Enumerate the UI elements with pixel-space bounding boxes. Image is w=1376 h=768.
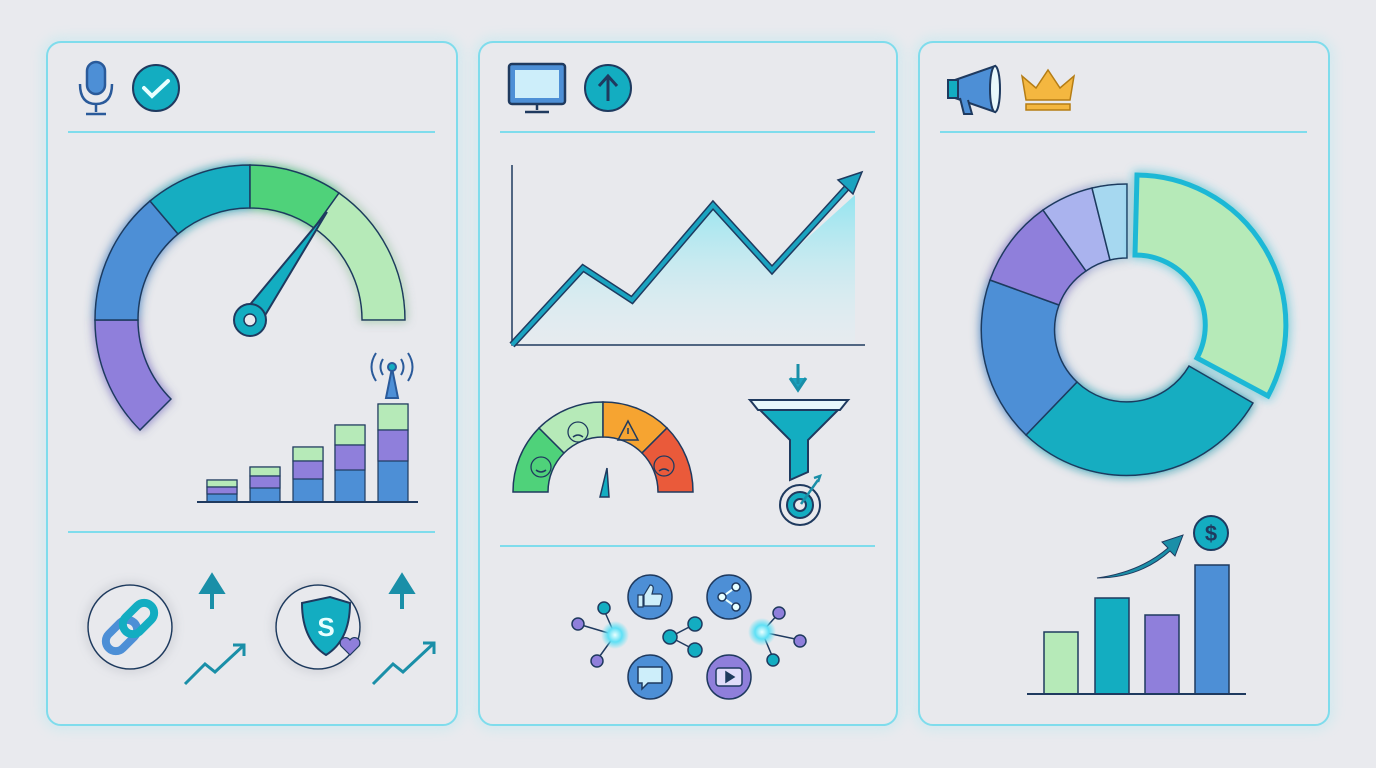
icon: check circle	[133, 65, 179, 111]
panel: middle	[479, 42, 897, 725]
icon: antenna	[372, 353, 412, 398]
icon: up arrow 1	[202, 576, 222, 609]
diagram: social network	[572, 575, 806, 699]
gauge needle	[234, 212, 327, 336]
icon: shield circle: S	[317, 612, 335, 642]
icon: link circle	[88, 585, 172, 669]
icon: funnel with target	[750, 364, 848, 525]
icon: monitor	[509, 64, 565, 112]
chart: stacked bars	[197, 404, 418, 502]
icon: trend arrow 2	[373, 643, 434, 684]
chart: donut	[981, 175, 1286, 475]
icon: up arrow 2	[392, 576, 412, 609]
chart: speedometer gauge	[95, 165, 405, 430]
icon: megaphone	[948, 66, 1000, 114]
icon: trend arrow 1	[185, 645, 244, 684]
chart: line growth	[512, 165, 865, 345]
icon: shield circle	[276, 585, 360, 669]
panel: right	[919, 42, 1329, 725]
panel: left	[47, 42, 457, 725]
icon: up arrow circle	[585, 65, 631, 111]
icon: dollar coin	[1194, 516, 1228, 550]
chart: sentiment gauge	[513, 402, 693, 497]
icon: growth curve arrow	[1097, 535, 1183, 578]
icon: crown	[1022, 70, 1074, 110]
chart: revenue bars	[1027, 565, 1246, 694]
icon: dollar coin: $	[1205, 521, 1217, 546]
icon: microphone	[80, 62, 112, 114]
